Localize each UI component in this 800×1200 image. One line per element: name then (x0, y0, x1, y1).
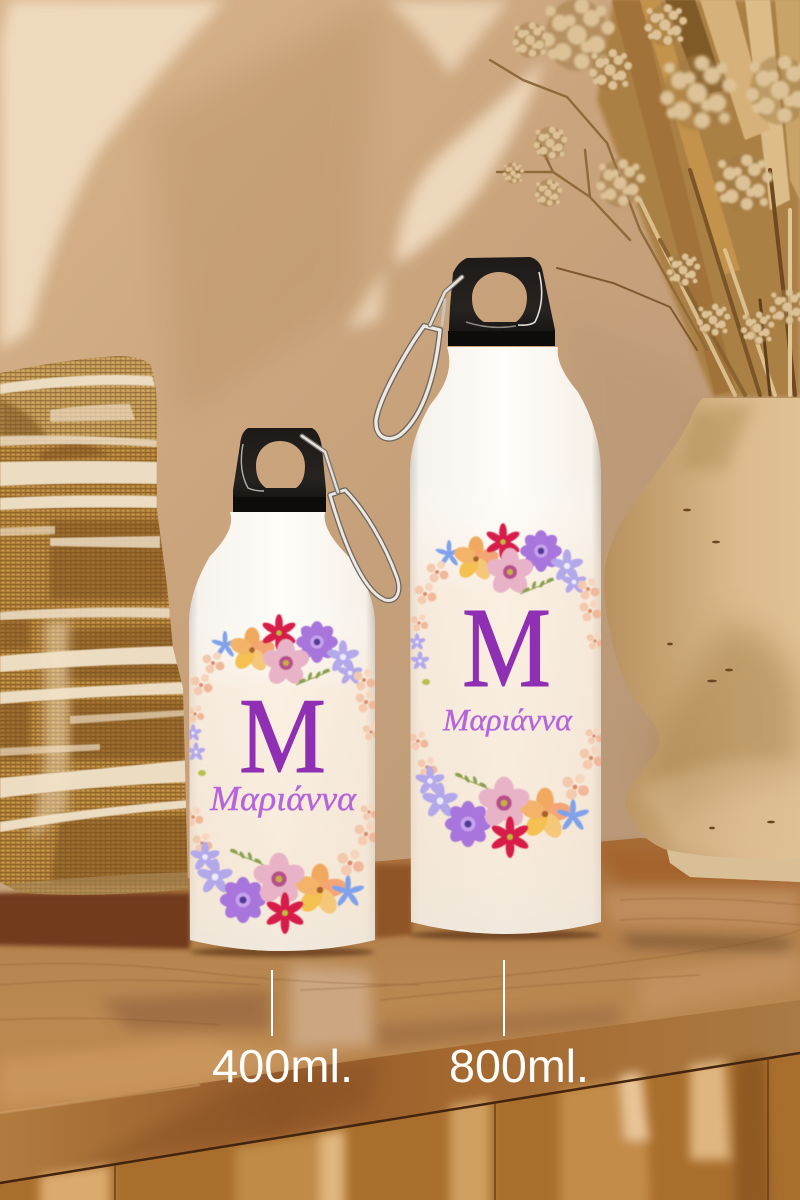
straw bundle (597, 0, 800, 397)
small bottle body (189, 512, 375, 951)
table front edge (0, 1000, 800, 1183)
large bottle body (410, 347, 601, 934)
background wall (0, 0, 800, 910)
400ml leader line (271, 970, 273, 1036)
table top (0, 838, 800, 1115)
large bottle cap (448, 257, 555, 346)
small bottle bottom wreath (184, 803, 379, 934)
flower clusters (503, 0, 800, 344)
400ml text: 400ml. (212, 1040, 353, 1092)
woven pillow (0, 350, 200, 910)
small bottle initial: M (239, 677, 326, 796)
bottle shadows on table (190, 930, 600, 957)
small bottle name: Μαριάννα (209, 779, 357, 818)
thin branches (490, 60, 707, 350)
large bottle 800ml (376, 257, 605, 945)
800ml text: 800ml. (449, 1040, 589, 1092)
dried plants (490, 0, 800, 397)
small bottle 400ml (184, 428, 399, 960)
large bottle print (410, 500, 601, 934)
stone vase (604, 398, 800, 882)
800ml label (449, 960, 589, 1092)
800ml leader line (503, 960, 505, 1036)
cabinet front (0, 1053, 800, 1200)
large bottle top wreath (408, 523, 604, 685)
small bottle top wreath (184, 614, 380, 776)
large bottle carabiner (376, 277, 462, 439)
small bottle cap (233, 428, 326, 512)
large bottle bottom wreath (409, 727, 604, 858)
large bottle name: Μαριάννα (442, 702, 573, 737)
large bottle initial: M (462, 584, 551, 711)
small bottle print (189, 614, 375, 951)
small bottle carabiner (302, 436, 399, 600)
